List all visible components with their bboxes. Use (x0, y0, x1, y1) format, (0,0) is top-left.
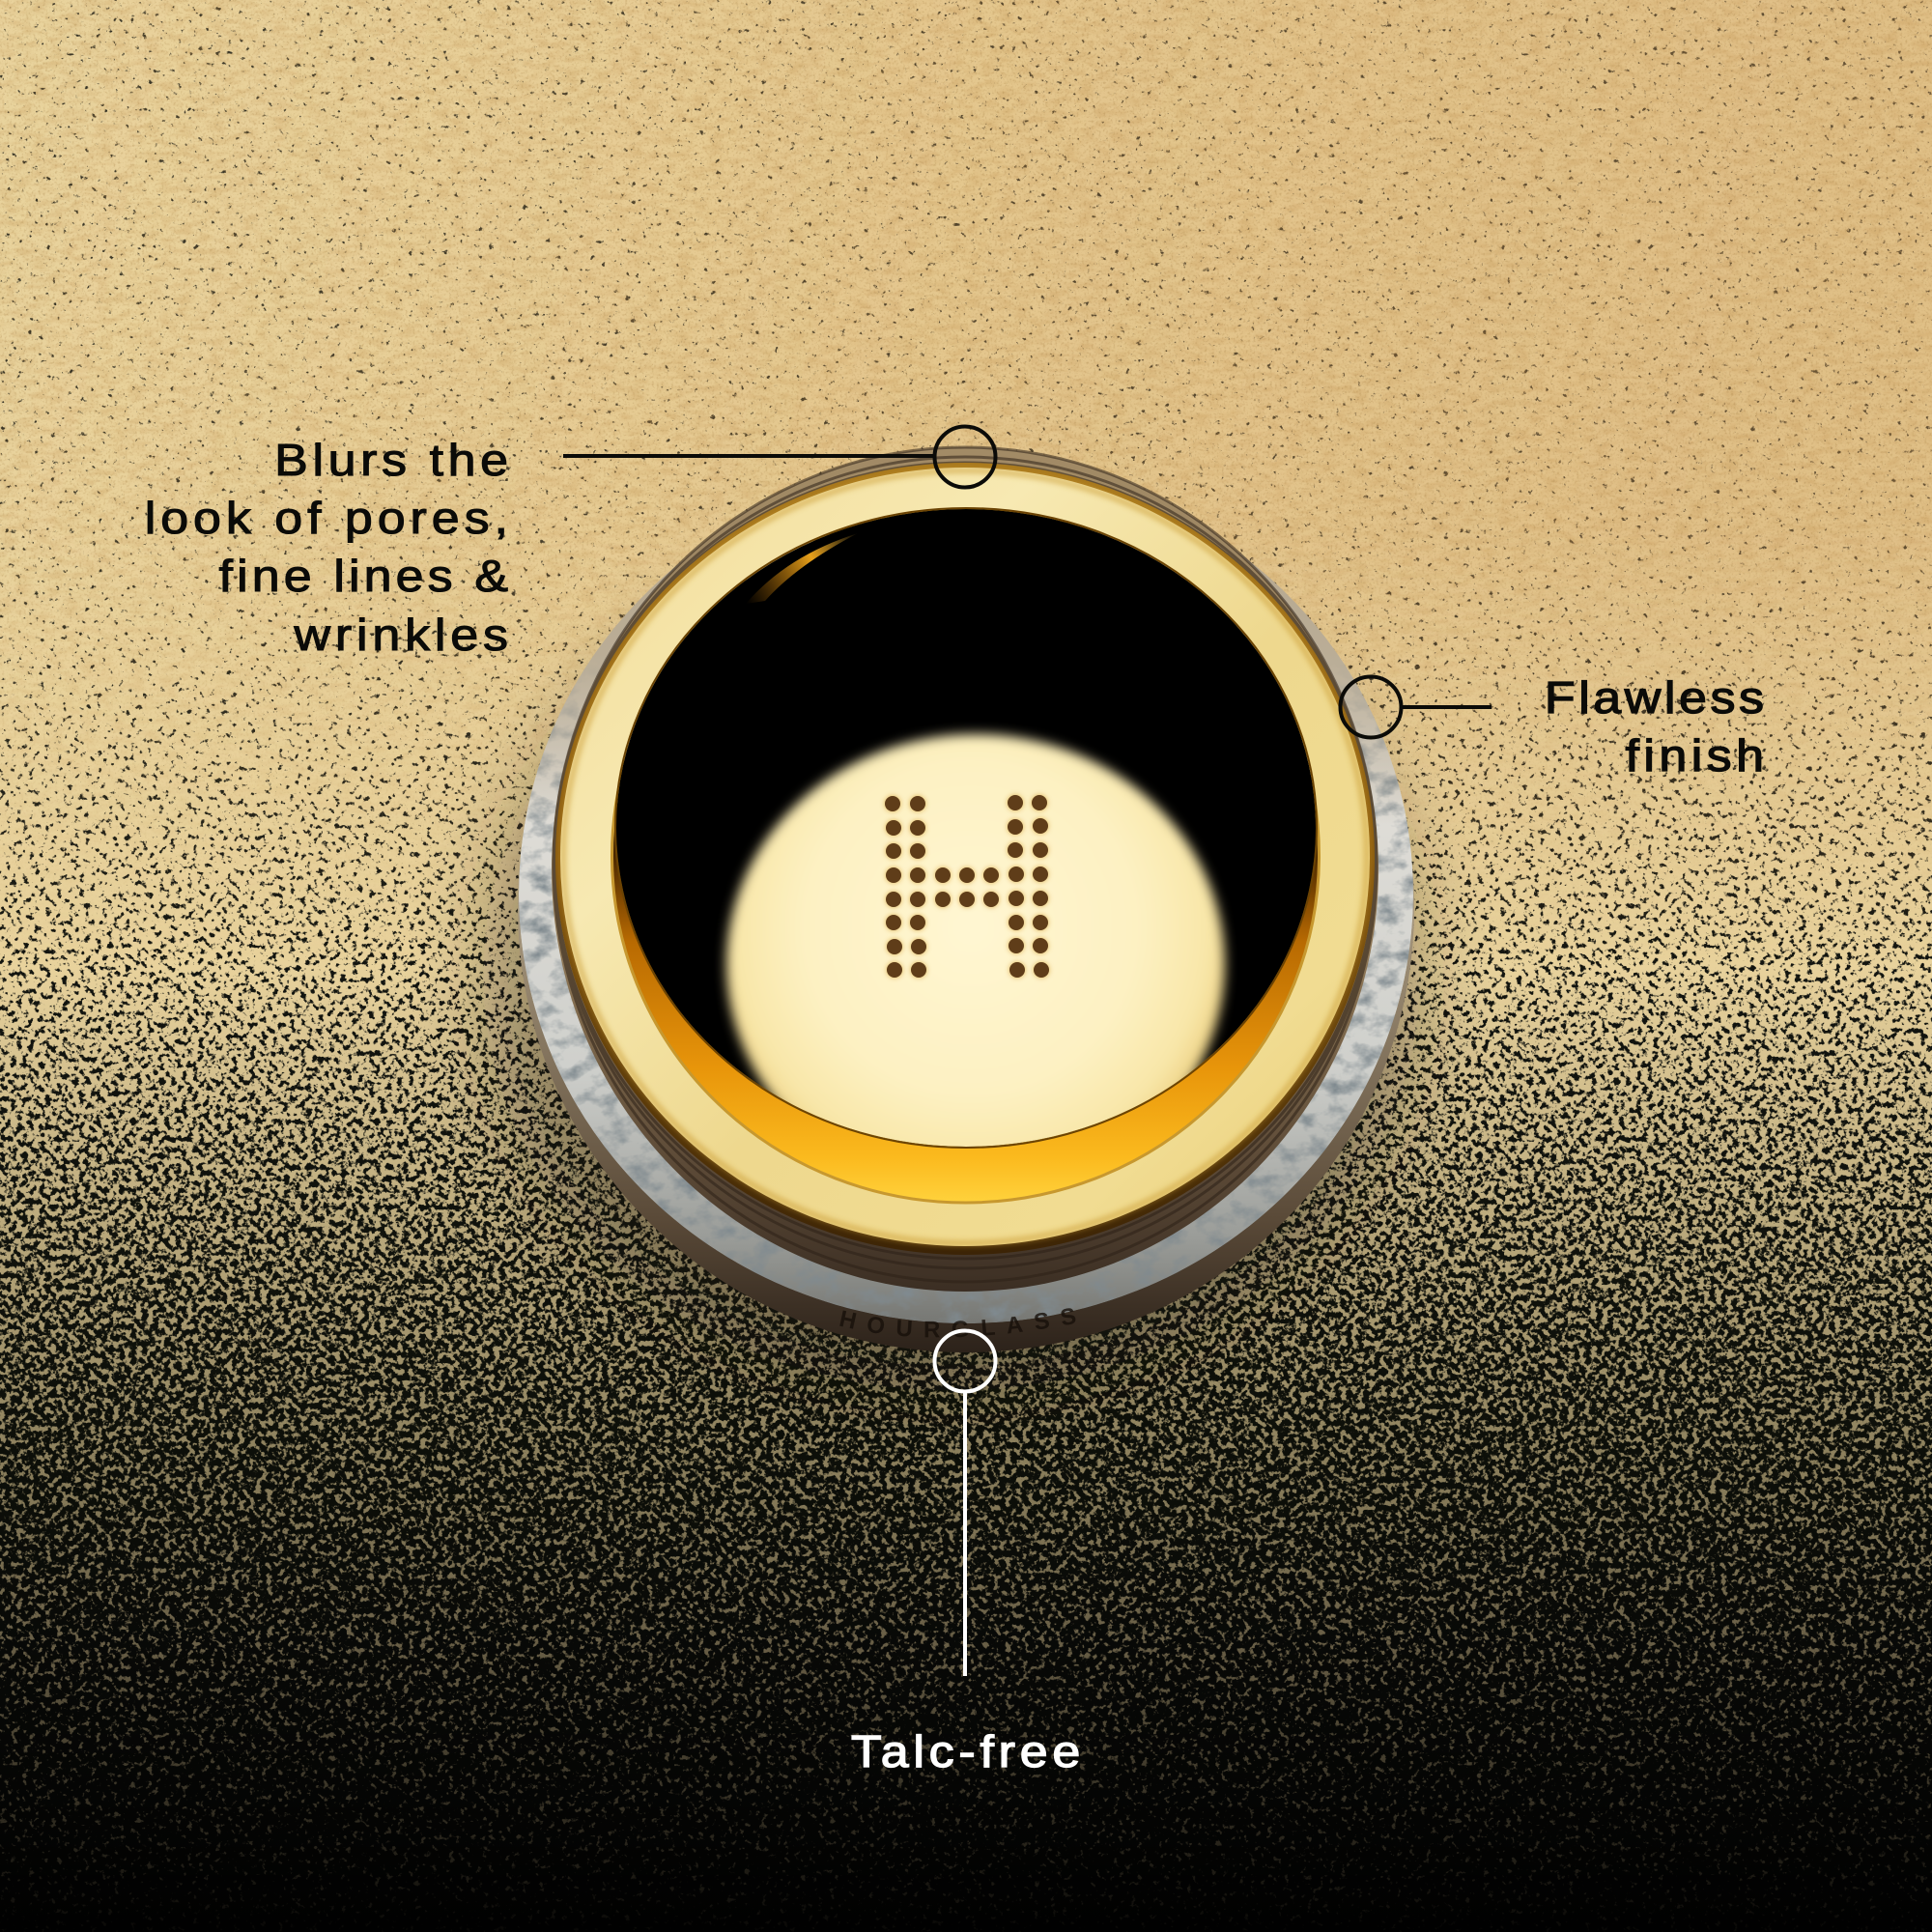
callout text: wrinkles (293, 611, 508, 660)
interior thin gold line (615, 508, 1317, 1148)
callout text: Flawless (1545, 674, 1764, 723)
leader line and marker (563, 427, 995, 487)
callout text: fine lines & (219, 553, 508, 601)
opening with amber interior (612, 509, 1320, 1203)
black interior (616, 509, 1316, 1147)
brand lettering on lip: HOURGLASS (839, 1308, 1076, 1337)
callout text (145, 437, 508, 660)
callout text: Talc-free (851, 1728, 1080, 1776)
body ridges (554, 447, 1377, 1282)
callout text: Blurs the (274, 437, 508, 485)
callout: blurs the look of pores (145, 427, 995, 660)
jar base lip (518, 464, 1414, 1352)
callout: flawless finish (1341, 674, 1764, 781)
dotted H logo (885, 795, 1049, 978)
marble band (519, 464, 1413, 1323)
translucent upper shoulder (519, 464, 1413, 1323)
leader line and marker (935, 1331, 995, 1676)
powder jar (518, 446, 1414, 1352)
jar shadow (483, 560, 1420, 1391)
top-left amber glint (746, 533, 858, 604)
callout text (1545, 674, 1764, 781)
callout text: look of pores, (145, 495, 508, 543)
callout text: finish (1625, 732, 1764, 781)
callout: talc-free (851, 1331, 1080, 1776)
gold collar shadow (555, 463, 1375, 1255)
ring outer edge tone (563, 470, 1367, 1243)
leader line and marker (1341, 676, 1492, 738)
gold ring (560, 468, 1370, 1246)
illuminated puff dome (726, 734, 1225, 1194)
brown glass body (552, 447, 1378, 1292)
